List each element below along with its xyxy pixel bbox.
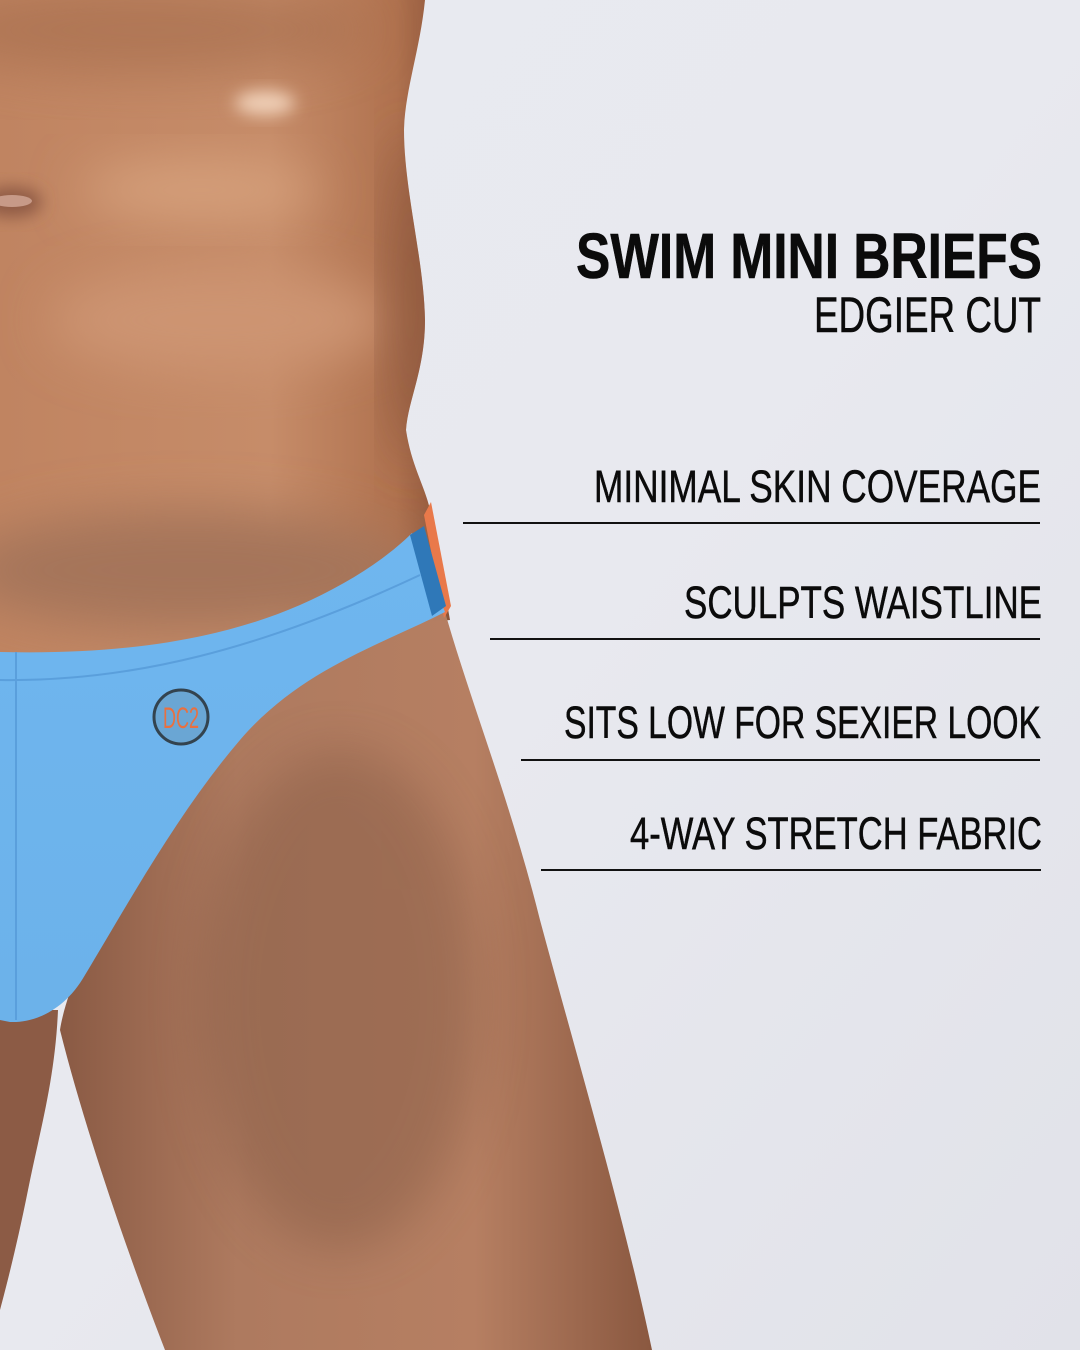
figure: torso and legs — [0, 0, 652, 1350]
swim briefs — [0, 502, 451, 1022]
briefs body — [0, 533, 445, 1022]
side stripe — [410, 526, 446, 616]
waistband tab — [424, 502, 451, 618]
stitching — [0, 575, 420, 1020]
torso — [0, 0, 450, 660]
right thigh — [60, 612, 652, 1350]
logo badge: DC2 — [163, 702, 199, 735]
navel — [0, 187, 42, 217]
leg hair shading — [200, 750, 480, 1250]
torso shading — [0, 0, 428, 630]
logo badge — [154, 690, 208, 744]
left thigh — [0, 1010, 58, 1310]
